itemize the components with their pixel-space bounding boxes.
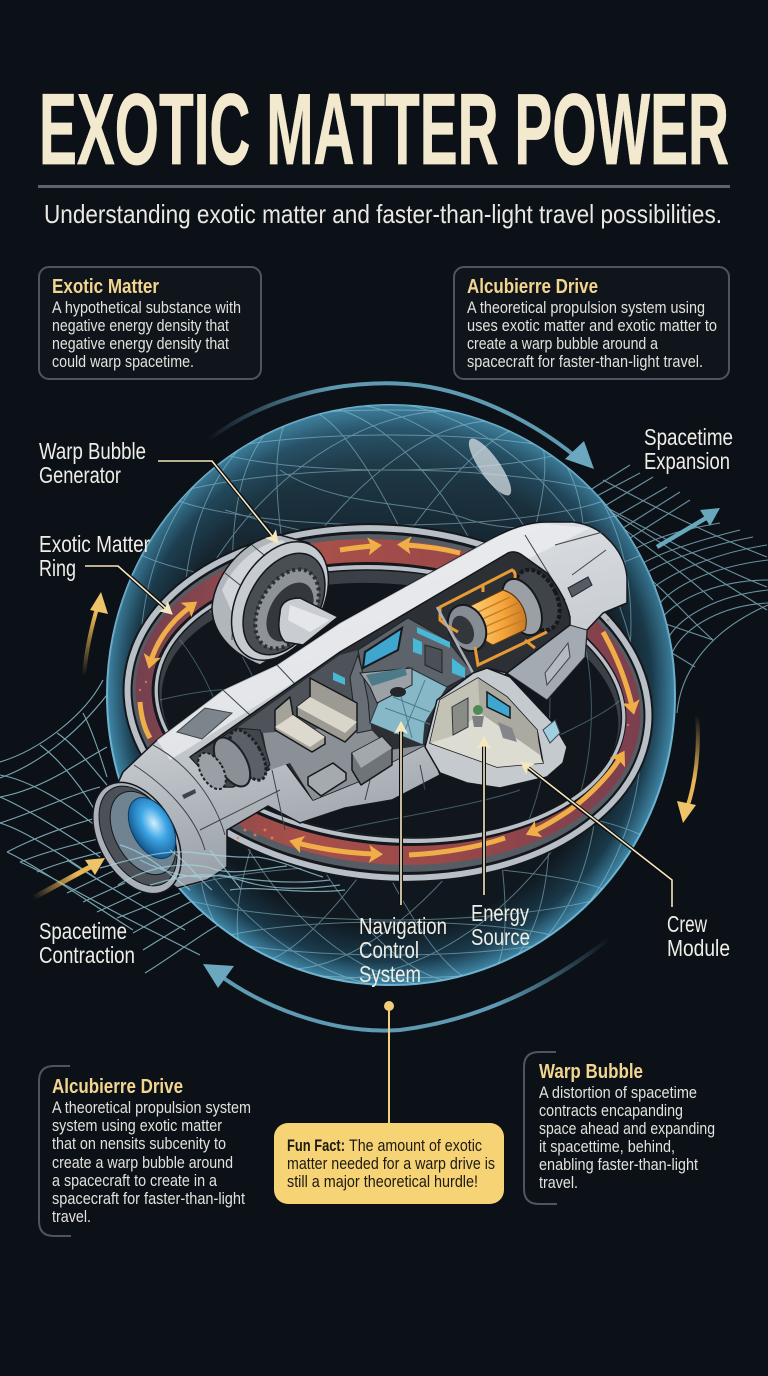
label: navigation control system: Control	[359, 937, 419, 963]
interior engine	[190, 724, 273, 794]
dividing wall	[350, 655, 372, 733]
cutaway interior	[190, 552, 570, 800]
crew door	[452, 698, 468, 735]
panel: alcubierre drive top: A theoretical propulsion system using	[467, 298, 705, 317]
cabinet	[352, 737, 392, 785]
panel: exotic matter: negative energy density that	[52, 334, 229, 353]
label: crew module: Module	[667, 935, 730, 961]
panel: alcubierre drive top: Alcubierre Drive	[467, 276, 598, 298]
lounge back wall	[237, 650, 368, 737]
label: spacetime expansion: Expansion	[644, 448, 730, 474]
panel: warp bubble	[524, 1052, 715, 1204]
panel: alcubierre drive top: uses exotic matter and exotic matter to	[467, 316, 717, 335]
arrow: yellow left	[84, 592, 108, 676]
callout: fun fact: still a major theoretical hurdle!	[287, 1172, 478, 1191]
panel: exotic matter: negative energy density that	[52, 316, 229, 335]
hull upper highlight	[157, 524, 590, 760]
label: spacetime contraction: Spacetime	[39, 918, 127, 944]
spacetime grid: right	[587, 465, 768, 713]
leader: warp bubble generator	[158, 461, 278, 543]
crew module	[425, 668, 567, 788]
panel: alcubierre drive top: create a warp bubble around a	[467, 334, 658, 353]
panel: warp bubble: A distortion of spacetime	[539, 1083, 697, 1102]
label: spacetime expansion	[644, 424, 733, 474]
label: spacetime expansion: Spacetime	[644, 424, 733, 450]
warp bubble generator	[212, 525, 348, 677]
panel: alcubierre drive bottom: travel.	[52, 1207, 91, 1226]
console	[360, 668, 412, 703]
panel: alcubierre drive top	[454, 267, 729, 379]
spacecraft hull	[75, 522, 627, 909]
panel: alcubierre drive bottom: system using exotic matter	[52, 1116, 222, 1135]
ring flow arrows	[140, 545, 632, 855]
callout: fun fact: The amount of exotic	[349, 1136, 482, 1155]
leader: exotic matter ring	[85, 566, 172, 614]
sphere highlight	[462, 433, 518, 501]
panel: exotic matter: Exotic Matter	[52, 276, 159, 298]
crew screen	[487, 692, 510, 718]
panel: alcubierre drive bottom: Alcubierre Drive	[52, 1076, 183, 1098]
panel: warp bubble: contracts encapanding	[539, 1101, 683, 1120]
engine nozzle	[75, 767, 199, 909]
lounge floor	[263, 725, 425, 800]
lower sofa	[275, 697, 325, 752]
navigation screen	[363, 628, 402, 668]
lower rear hull panel	[507, 625, 587, 700]
panel: alcubierre drive bottom: create a warp bubble around	[52, 1153, 233, 1172]
arrow: yellow right	[677, 715, 698, 823]
pod window	[543, 720, 560, 743]
panel: warp bubble: space ahead and expanding	[539, 1119, 715, 1138]
arrow: yellow contraction	[33, 858, 105, 898]
wall screens	[413, 638, 422, 655]
wall arch by reactor	[437, 607, 473, 673]
door	[425, 645, 442, 673]
label: energy source	[471, 900, 530, 950]
panel: warp bubble: travel.	[539, 1173, 578, 1192]
callout: fun fact: matter needed for a warp drive is	[287, 1154, 495, 1173]
crew seats	[498, 722, 517, 742]
panel: alcubierre drive bottom: a spacecraft to create in a	[52, 1171, 217, 1190]
spacetime grid: left	[0, 680, 240, 973]
label: exotic matter ring: Ring	[39, 555, 76, 581]
hull vents	[568, 577, 592, 597]
small unit	[308, 763, 346, 796]
label: warp bubble generator	[39, 438, 146, 488]
panel: warp bubble: it spacettime, behind,	[539, 1137, 675, 1156]
label: navigation control system: Navigation	[359, 913, 447, 939]
label: warp bubble generator: Generator	[39, 462, 121, 488]
hull panel lines	[134, 530, 610, 850]
arrow: top arc	[207, 383, 594, 469]
leader: energy source	[482, 737, 486, 895]
warp bubble sphere	[106, 404, 676, 986]
label: exotic matter ring: Exotic Matter	[39, 531, 150, 557]
sofa back	[297, 678, 357, 742]
panel: alcubierre drive bottom	[39, 1066, 251, 1236]
label: navigation control system: System	[359, 961, 421, 987]
leader: crew module	[521, 762, 672, 907]
bubble overlay waves	[100, 845, 345, 891]
panel: warp bubble: Warp Bubble	[539, 1061, 643, 1083]
exotic matter ring	[122, 523, 654, 883]
arrow: bottom arc	[203, 938, 610, 1031]
panel: alcubierre drive bottom: spacecraft for faster-than-light	[52, 1189, 245, 1208]
energy source reactor	[440, 563, 569, 665]
ember specks	[139, 619, 629, 840]
panel: alcubierre drive bottom: A theoretical propulsion system	[52, 1098, 251, 1117]
label: warp bubble generator: Warp Bubble	[39, 438, 146, 464]
panel: exotic matter	[39, 267, 261, 379]
control room walls	[358, 618, 473, 723]
panel: exotic matter: could warp spacetime.	[52, 352, 194, 371]
callout: fun fact: Fun Fact:	[287, 1136, 345, 1155]
control room floor	[370, 667, 447, 745]
plant	[473, 705, 483, 715]
label: energy source: Energy	[471, 900, 529, 926]
panel: alcubierre drive bottom: that on nensits subcenity to	[52, 1134, 226, 1153]
label: navigation control system	[359, 913, 447, 987]
label: spacetime contraction: Contraction	[39, 942, 135, 968]
callout: fun fact	[274, 1123, 504, 1204]
chair	[390, 687, 406, 697]
label: energy source: Source	[471, 924, 530, 950]
label: spacetime contraction	[39, 918, 135, 968]
panel: exotic matter: A hypothetical substance with	[52, 298, 241, 317]
label: exotic matter ring	[39, 531, 150, 581]
hull window	[177, 708, 232, 739]
sofa seat	[297, 697, 357, 733]
fun fact connector	[384, 1001, 394, 1124]
label: crew module	[667, 911, 730, 961]
panel: alcubierre drive top: spacecraft for faster-than-light travel.	[467, 352, 703, 371]
label: crew module: Crew	[667, 911, 708, 937]
leader: navigation	[399, 722, 403, 905]
arrow: teal expansion	[657, 508, 720, 547]
panel: warp bubble: enabling faster-than-light	[539, 1155, 698, 1174]
